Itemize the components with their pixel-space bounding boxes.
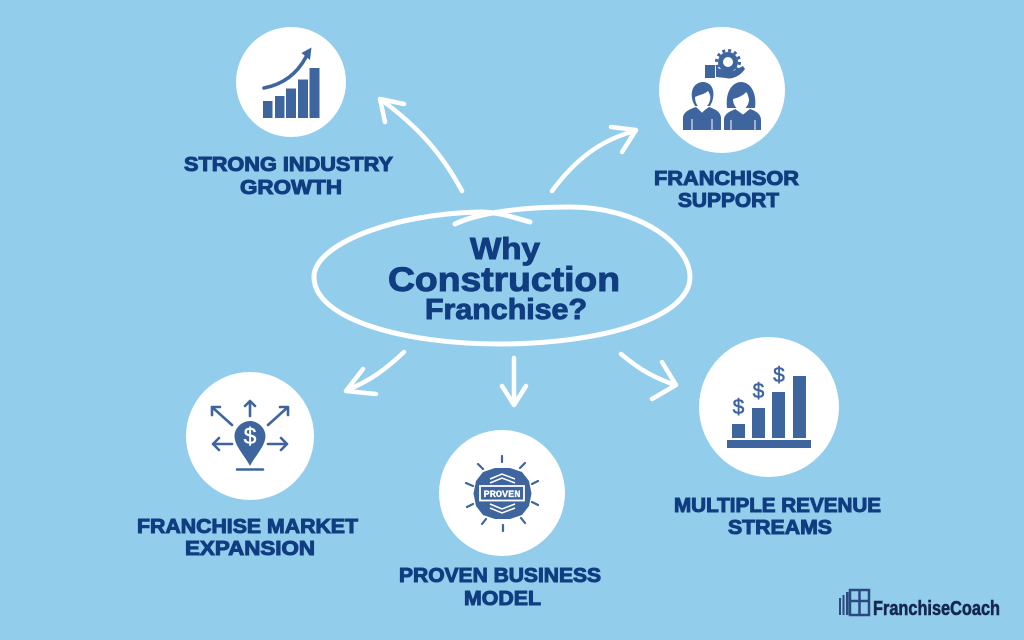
heading: franchisor support (654, 168, 800, 212)
panel: franchise market expansion (137, 372, 358, 560)
arrow: to proven business model (502, 358, 526, 405)
heading: multiple revenue streams: STREAMS (728, 517, 832, 539)
panel: proven business model (399, 430, 601, 610)
heading: multiple revenue streams (674, 495, 881, 539)
icon: revenue bars with dollars: $ (773, 364, 785, 387)
icon: revenue bars with dollars: $ (753, 380, 765, 403)
icon: dollar pin with arrows (186, 372, 314, 500)
heading: strong industry growth: STRONG INDUSTRY (184, 154, 394, 176)
logo: FranchiseCoach: FranchiseCoach (873, 598, 1000, 620)
title: Construction (388, 261, 620, 299)
title (388, 231, 620, 326)
icon: growth bar chart (236, 27, 346, 137)
panel: multiple revenue streams (674, 337, 881, 539)
arrow: to strong industry growth (380, 99, 462, 191)
heading: proven business model (399, 565, 601, 610)
icon: proven badge (439, 430, 565, 556)
panel: franchisor support (654, 27, 800, 212)
heading: strong industry growth (184, 154, 394, 199)
heading: strong industry growth: GROWTH (240, 177, 342, 199)
arrow: to multiple revenue streams (621, 354, 676, 399)
heading: proven business model: PROVEN BUSINESS (399, 565, 601, 587)
heading: franchisor support: SUPPORT (678, 190, 779, 212)
heading: franchise market expansion: FRANCHISE MARKET (137, 516, 358, 538)
man (692, 82, 713, 106)
heading: franchise market expansion: EXPANSION (185, 538, 315, 560)
icon: proven badge: PROVEN (484, 489, 520, 501)
arrow: to franchise market expansion (346, 352, 404, 394)
woman (727, 82, 755, 108)
central hand-drawn ellipse (314, 207, 690, 344)
title: Franchise? (425, 294, 587, 326)
heading: franchise market expansion (137, 516, 358, 560)
icon: dollar pin with arrows: $ (244, 423, 257, 449)
title: Why (470, 231, 541, 266)
icon: revenue bars with dollars: $ (733, 396, 745, 419)
icon: revenue bars with dollars (699, 337, 839, 477)
logo: FranchiseCoach (839, 590, 1000, 620)
panel: strong industry growth (184, 27, 394, 199)
heading: proven business model: MODEL (464, 588, 541, 610)
icon: people with gear in hand (659, 27, 785, 153)
arrow: to franchisor support (552, 127, 636, 191)
heading: franchisor support: FRANCHISOR (654, 168, 800, 190)
heading: multiple revenue streams: MULTIPLE REVENUE (674, 495, 881, 517)
